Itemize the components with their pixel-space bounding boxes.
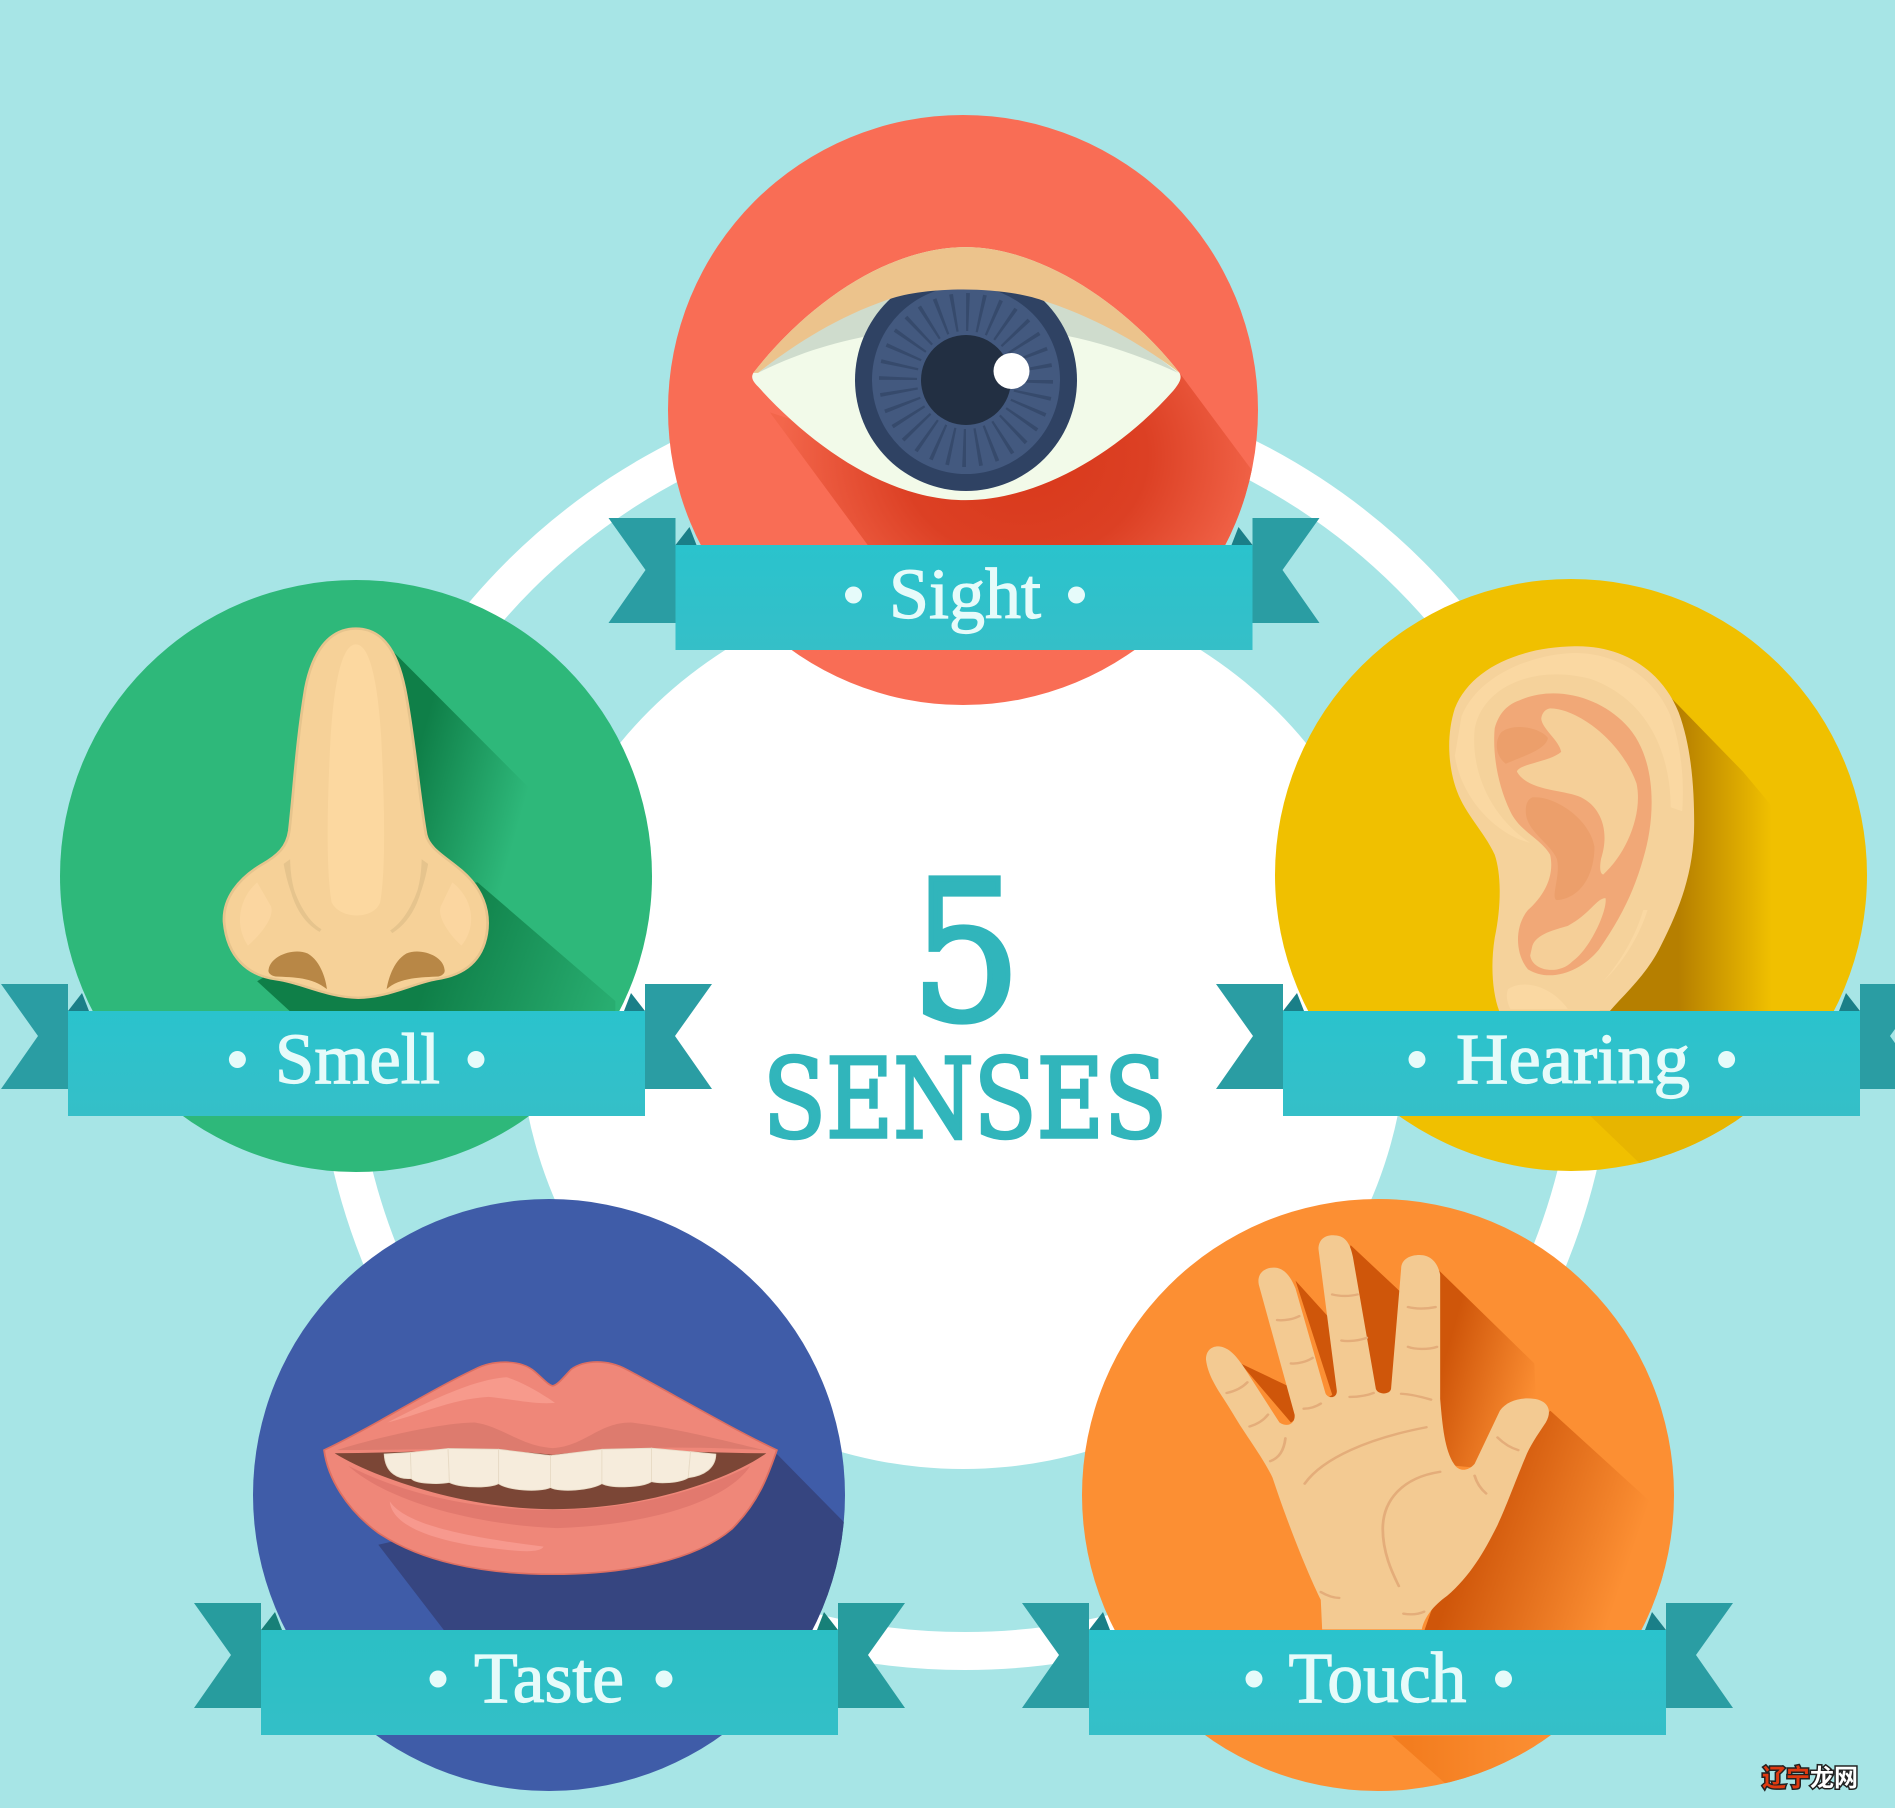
watermark: 辽宁龙网: [1762, 1765, 1858, 1792]
red circle: [668, 115, 1258, 705]
panel: hearing: [1275, 579, 1867, 1171]
ribbon: taste: [194, 1603, 905, 1735]
iris: [855, 269, 1077, 491]
ribbon: smell: Smell: [275, 1019, 440, 1099]
white connecting ring: [335, 391, 1595, 1651]
panel: taste: [253, 1199, 847, 1791]
title: [763, 841, 1167, 1163]
ribbon: touch: Touch: [1288, 1638, 1466, 1718]
icon: lips: [324, 1362, 847, 1631]
panel: smell: [60, 580, 652, 1172]
ribbon: hearing: [1216, 984, 1895, 1116]
teeth: [384, 1448, 716, 1490]
icon: ear: [1449, 646, 1789, 1171]
panel: sight: [668, 115, 1258, 705]
title numeral: 5: [911, 841, 1021, 1065]
ribbon: touch: [1022, 1603, 1733, 1735]
icon: nose: [224, 629, 615, 1015]
central white disc: [519, 581, 1407, 1469]
panel: touch: [1082, 1199, 1674, 1791]
ribbon: smell: [1, 984, 712, 1116]
blue circle: [253, 1199, 845, 1791]
ribbon: sight: Sight: [889, 554, 1041, 634]
orange circle: [1082, 1199, 1674, 1791]
ribbon: taste: Taste: [474, 1638, 624, 1718]
ribbon: sight: [608, 518, 1320, 650]
ribbon: hearing: Hearing: [1456, 1019, 1690, 1099]
palm creases: [1227, 1294, 1518, 1614]
icon: hand: [1206, 1235, 1663, 1785]
yellow circle: [1275, 579, 1867, 1171]
title word: SENSES: [763, 1035, 1167, 1163]
icon: eye: [752, 247, 1256, 547]
green circle: [60, 580, 652, 1172]
